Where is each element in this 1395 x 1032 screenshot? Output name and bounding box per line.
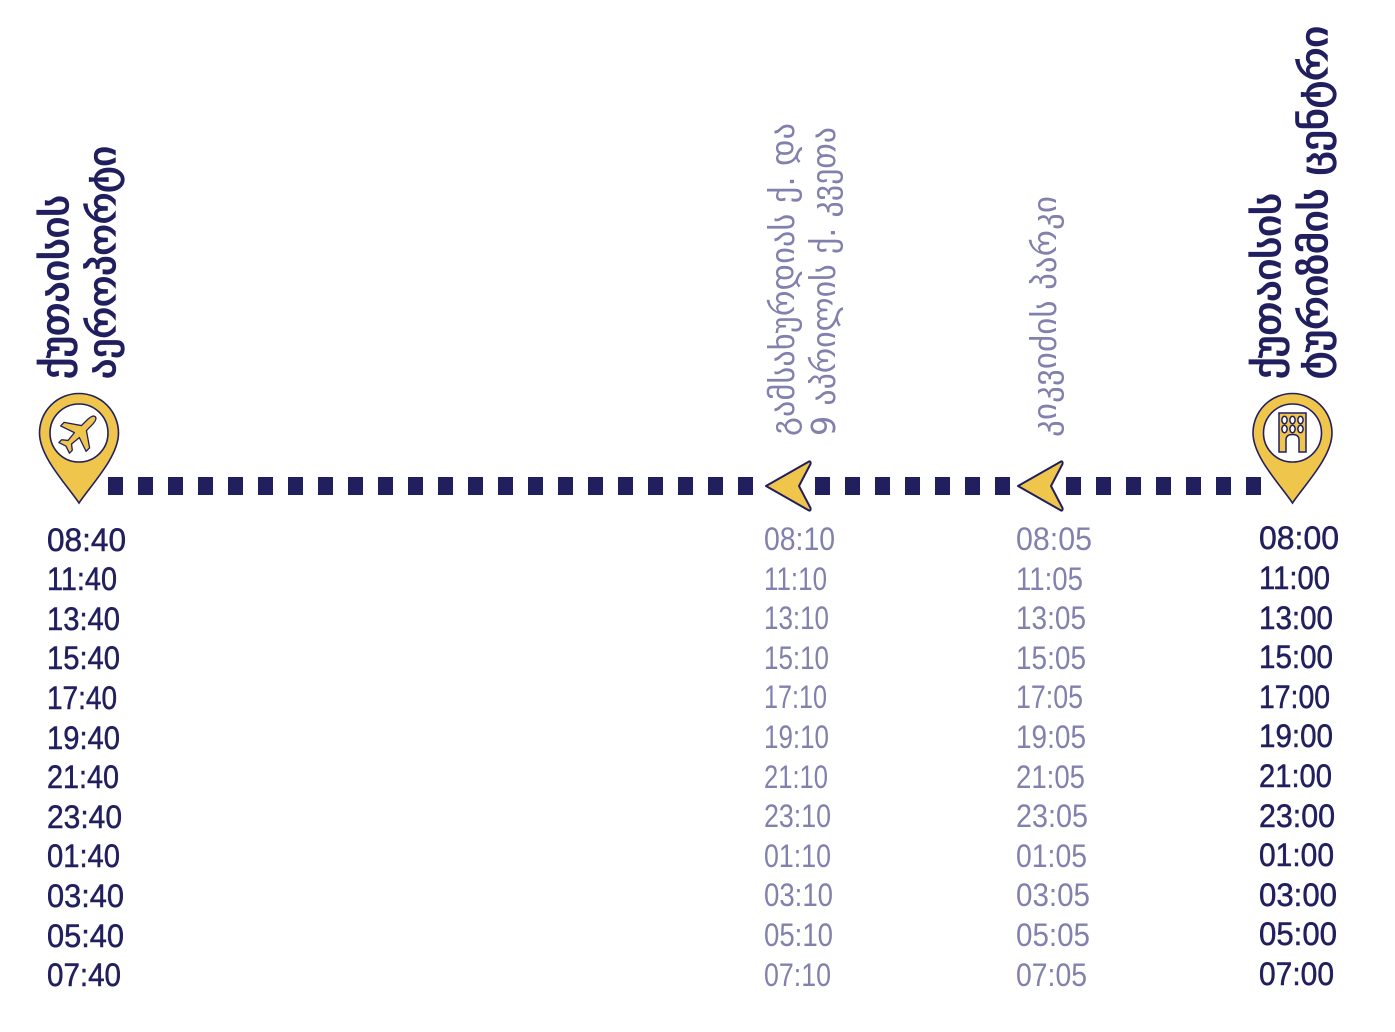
timetable column: airport: 17:40 <box>47 680 117 716</box>
timetable column: Gamsakhurdia stop: 13:10 <box>764 600 829 636</box>
timetable column: Kikvidze park stop: 23:05 <box>1016 798 1088 834</box>
icon: tourism centre pin with building <box>1253 394 1332 503</box>
timetable column: airport: 11:40 <box>47 561 117 597</box>
timetable column: Kikvidze park stop: 17:05 <box>1016 679 1083 715</box>
timetable column: airport: 01:40 <box>47 838 120 874</box>
timetable column: tourism centre: 05:00 <box>1259 916 1337 952</box>
timetable column: Gamsakhurdia stop: 11:10 <box>764 561 827 597</box>
stop label: Gamsakhurdia and 9 April streets: გამსახურდიას ქ. და <box>763 123 802 436</box>
heading: tourism centre label <box>1246 26 1336 379</box>
timetable column: airport: 23:40 <box>47 799 122 835</box>
timetable column: Gamsakhurdia stop: 15:10 <box>764 640 829 676</box>
timetable column: airport: 03:40 <box>47 878 124 914</box>
timetable column: tourism centre: 17:00 <box>1259 679 1330 715</box>
heading: airport label: ქუთაისის <box>34 195 77 379</box>
timetable column: tourism centre: 01:00 <box>1259 837 1334 873</box>
timetable column: airport: 07:40 <box>47 957 121 993</box>
timetable column: Gamsakhurdia stop: 01:10 <box>764 838 831 874</box>
timetable column: Kikvidze park stop: 08:05 <box>1016 521 1092 557</box>
timetable column: airport <box>47 522 126 993</box>
timetable column: airport: 13:40 <box>47 601 120 637</box>
timetable column: Kikvidze park stop: 05:05 <box>1016 917 1090 953</box>
timetable column: Kikvidze park stop: 13:05 <box>1016 600 1086 636</box>
timetable column: Kikvidze park stop: 01:05 <box>1016 838 1087 874</box>
timetable column: tourism centre <box>1259 520 1339 992</box>
timetable column: Gamsakhurdia stop: 03:10 <box>764 877 833 913</box>
stop label: Gamsakhurdia and 9 April streets <box>763 123 843 436</box>
timetable column: Kikvidze park stop <box>1016 521 1092 993</box>
timetable column: airport: 05:40 <box>47 918 124 954</box>
heading: tourism centre label: ქუთაისის <box>1246 193 1289 379</box>
timetable column: Kikvidze park stop: 03:05 <box>1016 877 1090 913</box>
timetable column: tourism centre: 08:00 <box>1259 520 1339 556</box>
timetable column: Kikvidze park stop: 15:05 <box>1016 640 1086 676</box>
timetable column: tourism centre: 13:00 <box>1259 600 1333 636</box>
timetable column: tourism centre: 11:00 <box>1259 560 1330 596</box>
timetable column: Gamsakhurdia stop <box>764 521 835 993</box>
timetable column: airport: 19:40 <box>47 720 120 756</box>
timetable column: Kikvidze park stop: 21:05 <box>1016 759 1085 795</box>
stop label: Kikvidze park: კიკვიძის პარკი <box>1025 196 1064 437</box>
timetable column: tourism centre: 19:00 <box>1259 718 1333 754</box>
timetable column: tourism centre: 07:00 <box>1259 956 1334 992</box>
timetable column: tourism centre: 23:00 <box>1259 798 1335 834</box>
timetable column: Kikvidze park stop: 11:05 <box>1016 561 1083 597</box>
timetable column: Kikvidze park stop: 19:05 <box>1016 719 1086 755</box>
stop label: Gamsakhurdia and 9 April streets: 9 აპრილის ქ. კვეთა <box>804 127 843 436</box>
timetable column: airport: 21:40 <box>47 759 119 795</box>
timetable column: tourism centre: 03:00 <box>1259 877 1337 913</box>
timetable column: Gamsakhurdia stop: 07:10 <box>764 957 831 993</box>
timetable column: Gamsakhurdia stop: 17:10 <box>764 679 827 715</box>
timetable column: Gamsakhurdia stop: 05:10 <box>764 917 833 953</box>
timetable column: Gamsakhurdia stop: 08:10 <box>764 521 835 557</box>
timetable column: Gamsakhurdia stop: 19:10 <box>764 719 829 755</box>
heading: airport label <box>34 146 124 379</box>
timetable column: tourism centre: 21:00 <box>1259 758 1332 794</box>
arrow: first stop <box>766 461 811 511</box>
timetable column: Gamsakhurdia stop: 23:10 <box>764 798 831 834</box>
timetable column: Kikvidze park stop: 07:05 <box>1016 957 1087 993</box>
dashed route line <box>108 477 1261 495</box>
timetable column: tourism centre: 15:00 <box>1259 639 1333 675</box>
heading: airport label: აეროპორტი <box>81 146 124 379</box>
heading: tourism centre label: ტურიზმის ცენტრი <box>1293 26 1336 379</box>
arrow: second stop <box>1018 461 1063 511</box>
timetable column: airport: 08:40 <box>47 522 126 558</box>
timetable column: airport: 15:40 <box>47 640 120 676</box>
icon: airport pin with plane <box>40 394 118 503</box>
timetable column: Gamsakhurdia stop: 21:10 <box>764 759 828 795</box>
